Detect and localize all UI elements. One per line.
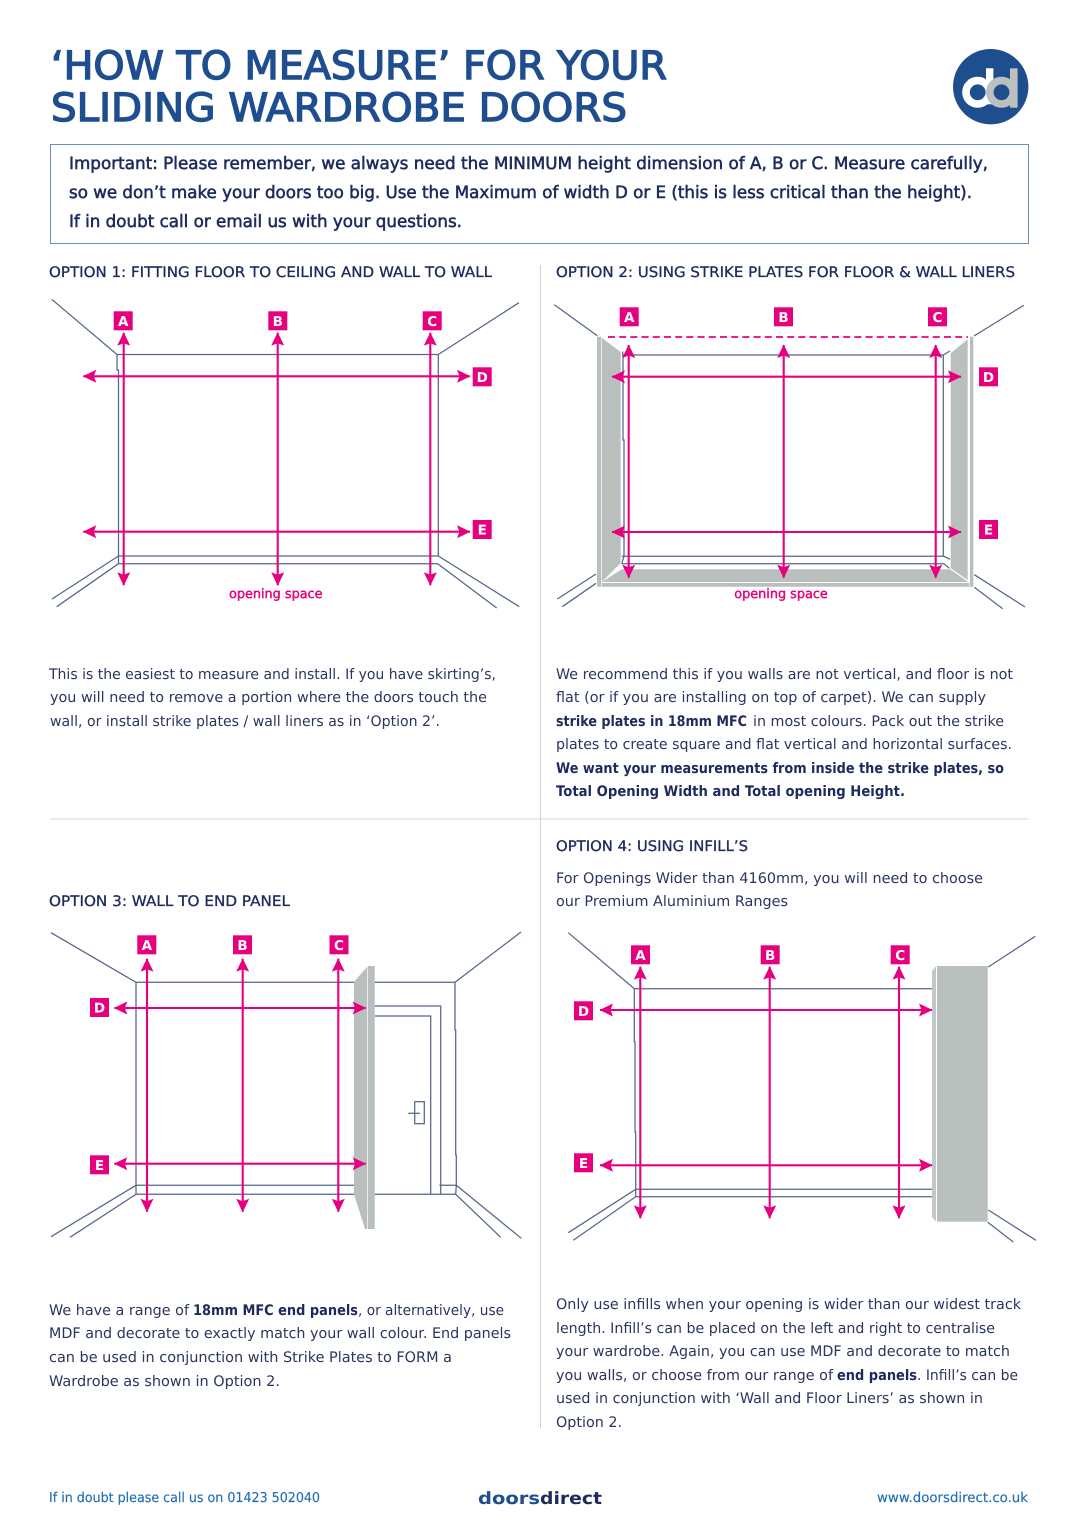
- text: option 4 intro: [556, 871, 983, 910]
- text: option 2 description: strike plates in 18mm MFC: [556, 714, 747, 730]
- diagram: option 4: E: [579, 1156, 588, 1172]
- text: option 3 description: Wardrobe as shown in Option 2.: [49, 1374, 280, 1390]
- heading: option 1: OPTION 1: FITTING FLOOR TO CEILING AND WALL TO WALL: [49, 265, 492, 281]
- text: option 3 description: We have a range of: [49, 1303, 190, 1319]
- text: option 2 description: flat (or if you are installing on top of carpet). We can supply: [556, 690, 986, 706]
- diagram: option 3: C: [334, 938, 344, 954]
- text: option 4 intro: For Openings Wider than 4160mm, you will need to choose: [556, 871, 983, 887]
- text: option 4 description: end panels: [837, 1368, 917, 1384]
- diagram: option 4: B: [765, 948, 775, 964]
- diagram: option 4: [568, 933, 1036, 1242]
- text: option 4 intro: our Premium Aluminium Ranges: [556, 894, 788, 910]
- text: option 2 description: in most colours. Pack out the strike: [753, 714, 1004, 730]
- callout: important note: [50, 144, 1028, 244]
- diagram: option 3: A: [142, 938, 153, 954]
- diagram: option 2: [554, 305, 1025, 609]
- title: ‘HOW TO MEASURE’ FOR YOUR: [51, 44, 667, 89]
- icon: dd logo: [953, 49, 1028, 124]
- diagram: option 2: D: [983, 370, 994, 386]
- text: option 1 description: wall, or install strike plates / wall liners as in ‘Option 2’.: [50, 714, 440, 730]
- diagram: option 2: opening space: [734, 587, 828, 602]
- title: [51, 44, 667, 131]
- text: option 3 description: , or alternatively, use: [358, 1303, 504, 1319]
- footer: doorsdirect logo: [478, 1489, 602, 1509]
- text: option 3 description: [49, 1303, 511, 1390]
- diagram: option 1: B: [273, 314, 283, 330]
- callout: important note: If in doubt call or email us with your questions.: [69, 212, 462, 232]
- text: option 4 description: used in conjunction with ‘Wall and Floor Liners’ as shown in: [556, 1391, 983, 1407]
- diagram: option 3: B: [237, 938, 248, 954]
- text: option 4 description: your wardrobe. Again, you can use MDF and decorate to match: [556, 1344, 1010, 1360]
- diagram: option 4: D: [578, 1004, 589, 1020]
- footer: doorsdirect logo: doors: [478, 1489, 540, 1509]
- footer: doorsdirect logo: direct: [540, 1489, 602, 1509]
- callout: important note: Important: Please remember, we always need the MINIMUM height dimension of A, B or C. Measure carefully,: [69, 154, 988, 174]
- diagram: option 1: opening space: [229, 587, 322, 602]
- text: option 4 description: you walls, or choose from our range of: [556, 1368, 834, 1384]
- title: SLIDING WARDROBE DOORS: [51, 86, 627, 131]
- diagram: option 1: C: [427, 314, 437, 330]
- text: option 4 description: Only use infills when your opening is wider than our widest track: [556, 1297, 1022, 1313]
- heading: option 3: OPTION 3: WALL TO END PANEL: [49, 894, 290, 910]
- text: option 4 description: length. Infill’s can be placed on the left and right to centralise: [556, 1321, 995, 1337]
- diagram: option 4: A: [635, 948, 646, 964]
- heading: option 4: OPTION 4: USING INFILL’S: [556, 839, 748, 855]
- text: option 3 description: 18mm MFC end panels: [193, 1303, 358, 1319]
- diagram: option 2: A: [624, 310, 635, 326]
- diagram: option 1: A: [118, 314, 129, 330]
- callout: important note: so we don’t make your doors too big. Use the Maximum of width D or E (this is less critical than the height).: [69, 183, 972, 203]
- text: option 2 description: [556, 667, 1013, 800]
- text: option 2 description: We want your measurements from inside the strike plates, so: [556, 761, 1004, 777]
- diagram: option 2: C: [933, 310, 943, 326]
- diagram: option 1: D: [477, 370, 488, 386]
- diagram: option 2: B: [778, 310, 789, 326]
- diagram: option 1: E: [478, 522, 487, 538]
- text: option 1 description: This is the easiest to measure and install. If you have skirting’s,: [48, 667, 496, 683]
- diagram: option 1: [52, 299, 519, 608]
- footer: phone: If in doubt please call us on 01423 502040: [49, 1490, 320, 1506]
- diagram: option 2: E: [984, 522, 993, 538]
- diagram: option 4: C: [895, 948, 905, 964]
- text: option 1 description: [48, 667, 496, 730]
- heading: option 2: OPTION 2: USING STRIKE PLATES FOR FLOOR & WALL LINERS: [556, 265, 1015, 281]
- diagram: option 3: D: [94, 1000, 105, 1016]
- text: option 1 description: you will need to remove a portion where the doors touch the: [50, 690, 487, 706]
- text: option 3 description: MDF and decorate to exactly match your wall colour. End panels: [49, 1326, 511, 1342]
- text: option 4 description: [556, 1297, 1022, 1431]
- text: option 2 description: We recommend this if you walls are not vertical, and floor is not: [556, 667, 1013, 683]
- text: option 4 description: . Infill’s can be: [917, 1368, 1018, 1384]
- icon: door: [375, 1006, 441, 1194]
- footer: website: www.doorsdirect.co.uk: [877, 1490, 1028, 1506]
- text: option 4 description: Option 2.: [556, 1415, 622, 1431]
- text: option 3 description: can be used in conjunction with Strike Plates to FORM a: [49, 1350, 452, 1366]
- text: option 2 description: plates to create square and flat vertical and horizontal surfaces.: [556, 737, 1012, 753]
- text: option 2 description: Total Opening Width and Total opening Height.: [556, 784, 905, 800]
- diagram: option 3: E: [95, 1158, 104, 1174]
- diagram: option 3: [51, 932, 521, 1238]
